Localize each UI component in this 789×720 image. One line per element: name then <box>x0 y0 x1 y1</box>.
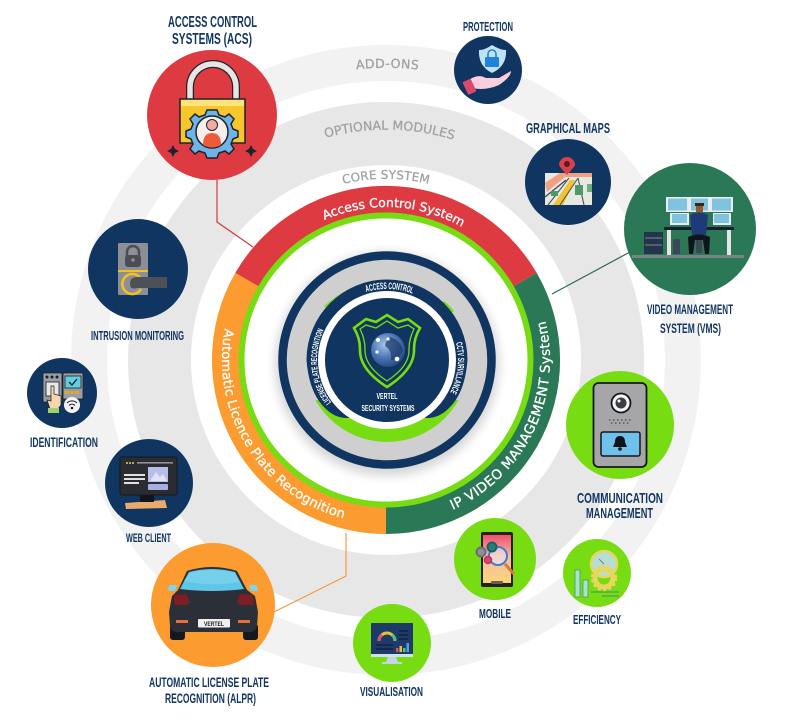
node: automatic license plate recognition <box>151 543 275 667</box>
ring heading: core system: CORE SYSTEM <box>342 170 430 184</box>
node: mobile <box>454 518 536 600</box>
badge shadow <box>275 252 499 476</box>
label: automatic license plate recognition: AUTOMATIC LICENSE PLATE <box>149 674 269 690</box>
icon: security operator desk <box>632 197 744 258</box>
icon: desktop monitor <box>120 457 177 509</box>
label: intrusion monitoring: INTRUSION MONITORING <box>91 329 184 343</box>
label: access control system: Access Control System <box>324 198 464 227</box>
ring heading: optional modules: OPTIONAL MODULES <box>324 120 455 140</box>
badge subtitle: SECURITY SYSTEMS <box>362 403 415 413</box>
node: video management system <box>624 163 756 295</box>
icon: map with pin <box>545 157 592 205</box>
segment: access control system <box>235 186 537 286</box>
label: visualisation: VISUALISATION <box>360 684 423 699</box>
connector: access control <box>217 178 253 247</box>
ring: optional modules <box>160 134 612 586</box>
connector: licence plate <box>274 533 346 612</box>
label: access control systems: SYSTEMS (ACS) <box>172 31 252 48</box>
node: intrusion monitoring <box>88 219 188 319</box>
icon: door lock handle <box>118 243 167 295</box>
icon: video door phone <box>594 383 646 467</box>
label: IP video management system: IP VIDEO MANAGEMENT System <box>450 322 553 510</box>
label: communication management: COMMUNICATION <box>577 490 663 507</box>
label: protection: PROTECTION <box>463 20 513 34</box>
green crescent <box>316 400 458 442</box>
label: access control systems: ACCESS CONTROL <box>168 14 257 31</box>
badge title: VERTEL <box>376 391 398 401</box>
center badge <box>271 248 503 480</box>
label: identification: IDENTIFICATION <box>30 435 98 450</box>
node: graphical maps <box>525 139 611 225</box>
node: communication management <box>566 371 674 479</box>
node: web client <box>105 439 193 527</box>
green top slivers <box>325 291 453 312</box>
label: video management system: SYSTEM (VMS) <box>660 320 721 336</box>
ring heading: add-ons: ADD-ONS <box>356 58 418 70</box>
label: communication management: MANAGEMENT <box>586 505 653 522</box>
green inner band <box>242 216 530 504</box>
icon: gear, clock and bars <box>575 551 619 597</box>
label: automatic licence plate recognition: Automatic Licence Plate Recognition <box>222 328 344 518</box>
icon: hand holding shield <box>462 45 511 95</box>
arc label: CCTV surveillance: CCTV SURVILLANCE <box>450 342 464 395</box>
label: automatic license plate recognition: RECOGNITION (ALPR) <box>165 690 256 706</box>
node: efficiency <box>563 539 631 607</box>
connector: video management <box>552 252 630 294</box>
node: protection <box>454 36 522 104</box>
segment: automatic licence plate recognition <box>212 273 386 534</box>
node: identification <box>27 358 97 428</box>
core ring <box>212 186 560 534</box>
label: graphical maps: GRAPHICAL MAPS <box>526 121 610 137</box>
node: access control systems <box>147 50 277 180</box>
arc label: license plate recognition: LICENSE PLATE RECOGNITION <box>311 328 331 406</box>
node: visualisation <box>353 604 431 682</box>
segment: IP video management system <box>386 273 560 534</box>
navy text band <box>306 280 468 418</box>
label: mobile: MOBILE <box>479 606 511 621</box>
plate text: VERTEL <box>204 621 224 628</box>
label: web client: WEB CLIENT <box>126 531 171 545</box>
navy outer ring <box>282 256 492 464</box>
icon: biometric access panel <box>43 373 83 413</box>
icon: padlock with gear <box>167 64 257 158</box>
icon: dashboard monitor <box>371 623 413 664</box>
arc label: access control: ACCESS CONTROL <box>366 282 413 294</box>
white ring and navy disc <box>322 294 452 426</box>
ring: add-ons <box>89 63 683 657</box>
label: efficiency: EFFICIENCY <box>573 612 621 627</box>
icon: shield with globe <box>354 315 420 387</box>
icon: phone with magnifier <box>476 532 514 587</box>
